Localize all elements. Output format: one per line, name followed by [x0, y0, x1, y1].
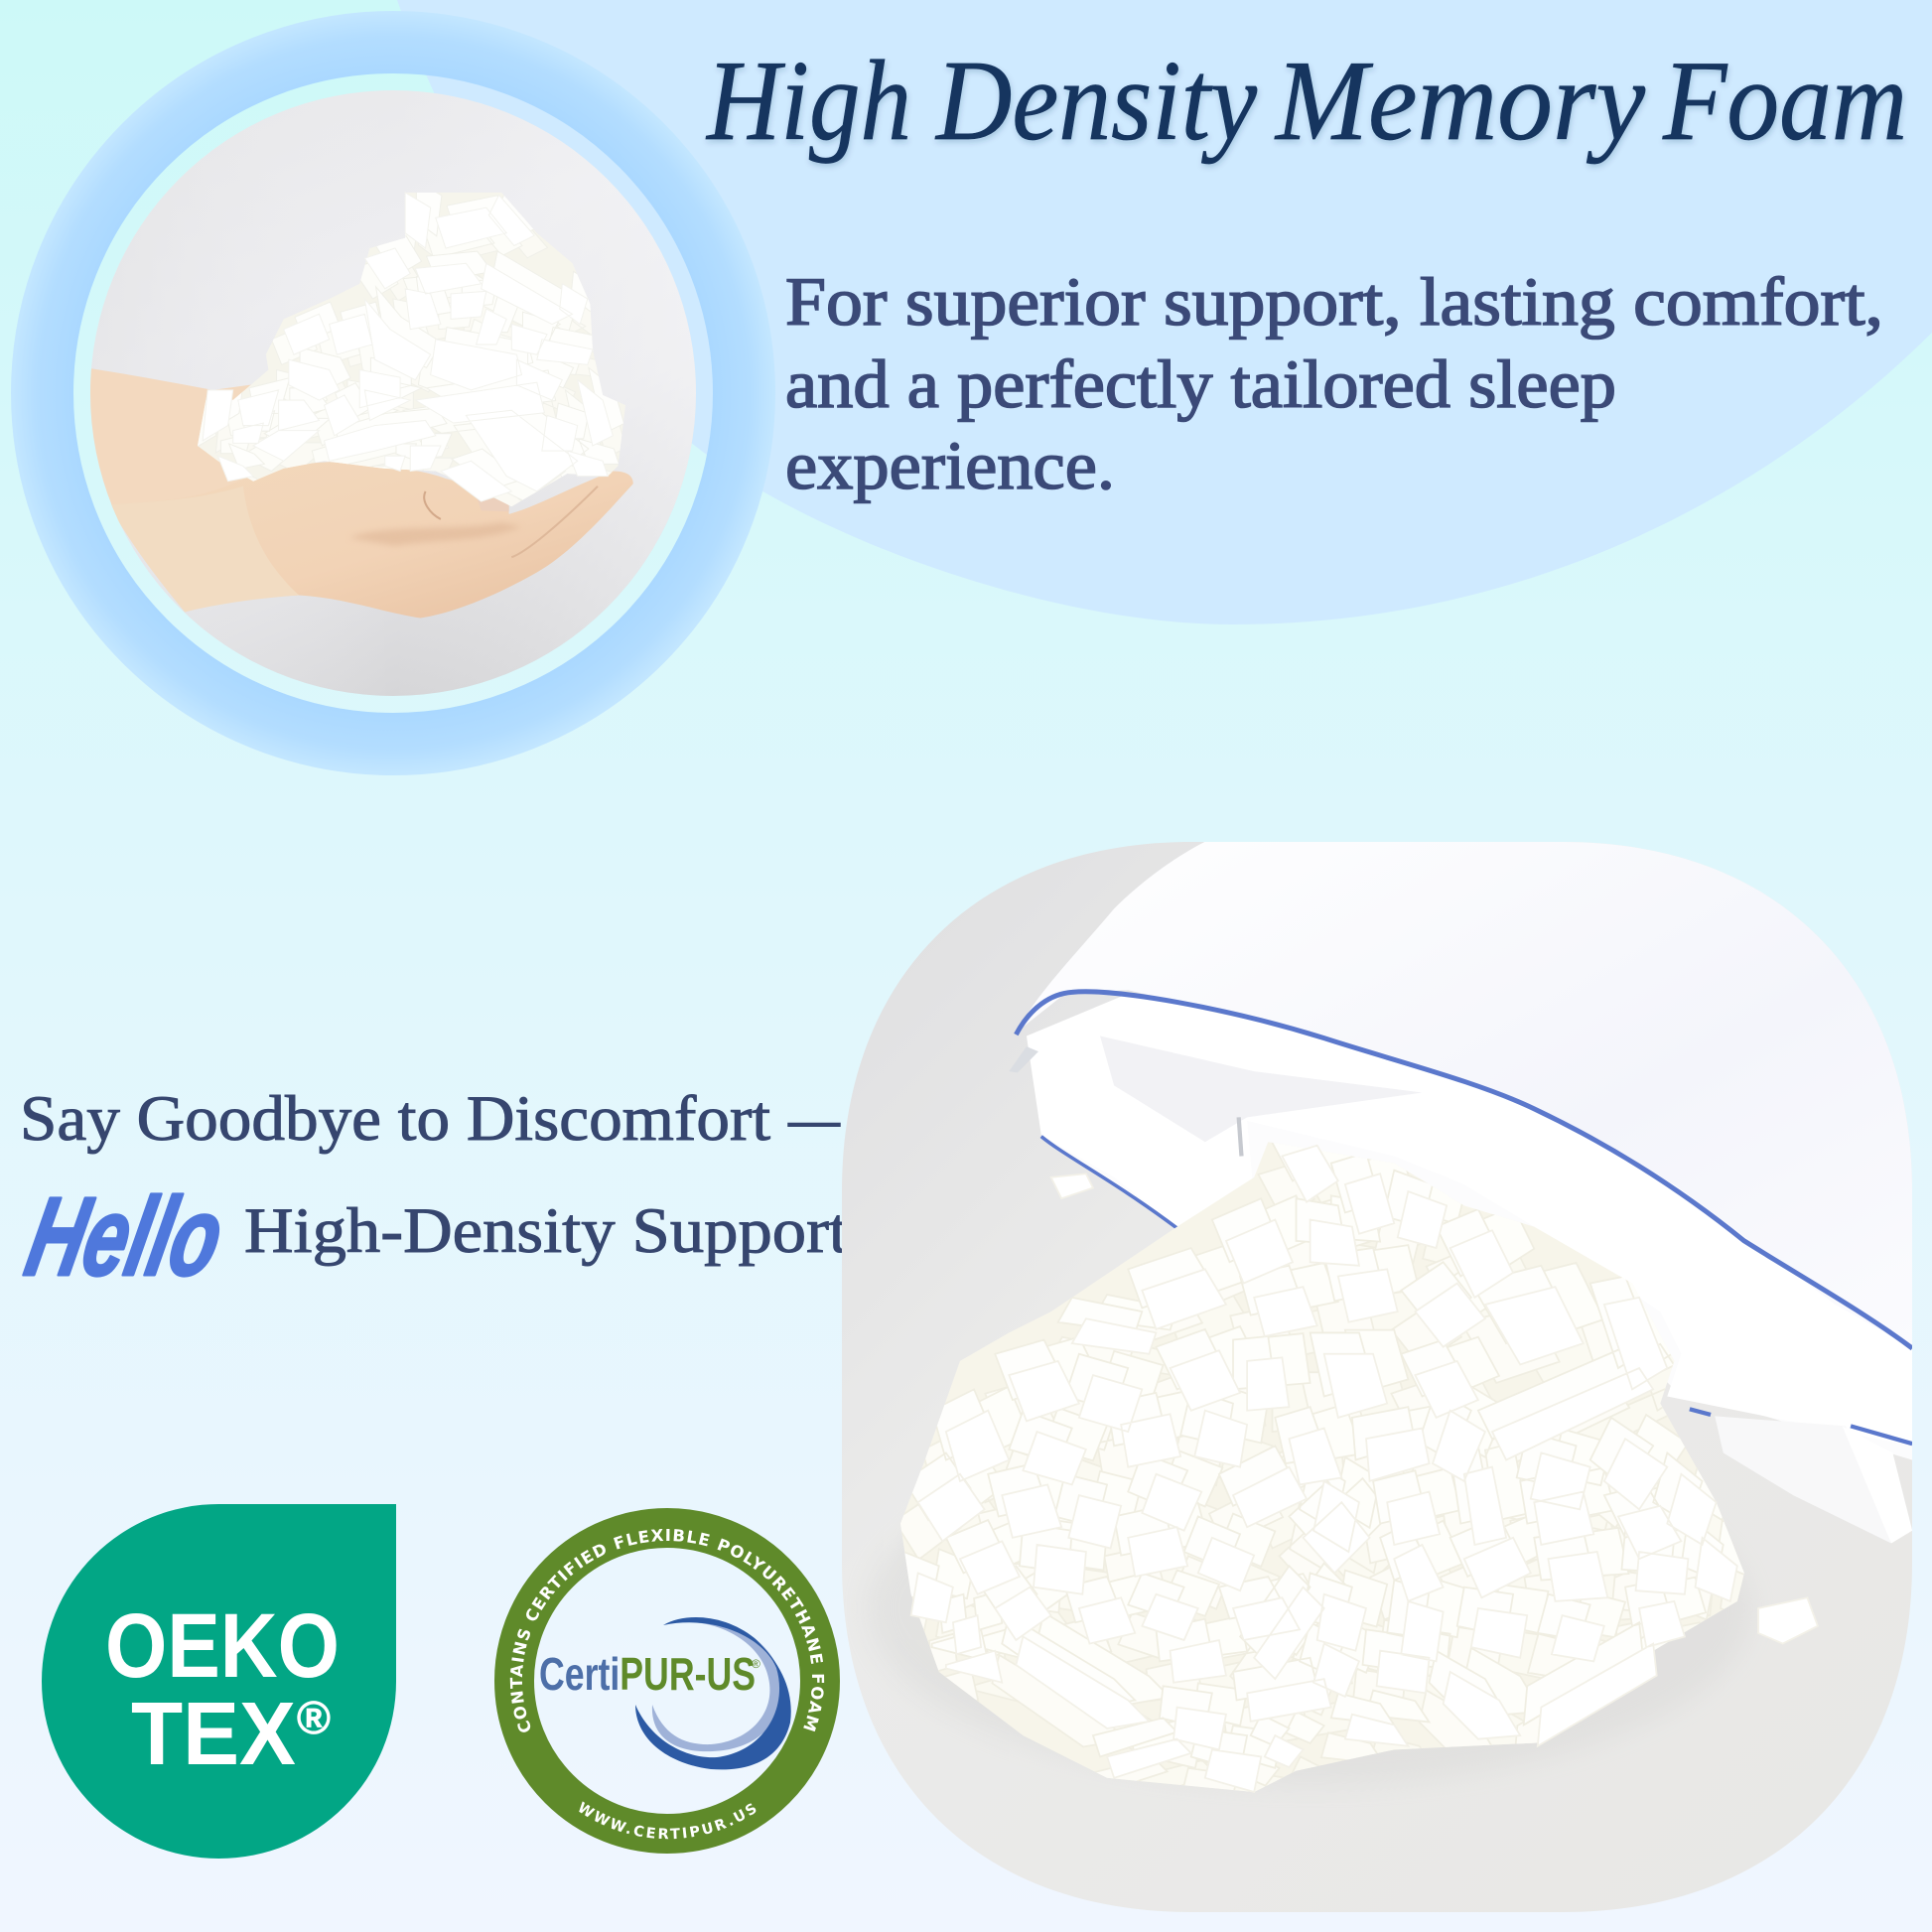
body text	[785, 264, 1883, 503]
tagline: —	[787, 1083, 841, 1155]
hello script word: Hello	[17, 1173, 233, 1299]
body text: For superior support, lasting comfort,	[785, 264, 1883, 340]
background blue blob	[397, 0, 1932, 624]
badge: OEKO-TEX: TEX	[131, 1685, 296, 1784]
foam pile	[888, 1122, 1843, 1813]
body text: and a perfectly tailored sleep	[785, 346, 1616, 422]
care label	[1715, 1416, 1912, 1544]
badge: CertiPUR-US: WWW.CERTIPUR.US	[579, 1801, 757, 1839]
tagline: High-Density Support	[244, 1195, 848, 1267]
badge: CertiPUR-US: ®	[752, 1657, 760, 1671]
badge: CertiPUR-US: CONTAINS CERTIFIED FLEXIBLE POLYURETHANE FOAM	[510, 1529, 824, 1732]
cupped hand	[109, 462, 633, 618]
pillow back flap	[1045, 1121, 1912, 1459]
title: Foam	[1662, 38, 1907, 165]
pillow top	[1016, 842, 1912, 1348]
title	[705, 38, 1907, 165]
floor shadow	[889, 1565, 1725, 1758]
foam pile in hand	[191, 181, 633, 513]
swoosh	[635, 1617, 791, 1769]
body text: experience.	[785, 428, 1115, 503]
blue piping	[1016, 992, 1912, 1348]
title: High	[705, 38, 911, 165]
badge: CertiPUR-US: CertiPUR-US	[539, 1648, 756, 1700]
rear arm	[90, 368, 250, 504]
zippers	[1009, 1046, 1038, 1073]
title: Memory	[1274, 38, 1645, 165]
ring around foam photo	[42, 42, 745, 745]
badge: CertiPUR-US	[494, 1508, 840, 1854]
badge: OEKO-TEX: ®	[297, 1692, 331, 1743]
badge: OEKO-TEX	[42, 1504, 396, 1859]
badge: OEKO-TEX: OEKO	[105, 1595, 340, 1697]
pillow inner cover	[1027, 997, 1763, 1416]
photo: pillow spilling shredded foam	[842, 842, 1912, 1912]
tagline	[17, 1083, 848, 1299]
tagline: Say Goodbye to Discomfort	[20, 1083, 770, 1155]
photo: hands holding shredded foam	[86, 90, 696, 696]
title: Density	[934, 38, 1257, 165]
